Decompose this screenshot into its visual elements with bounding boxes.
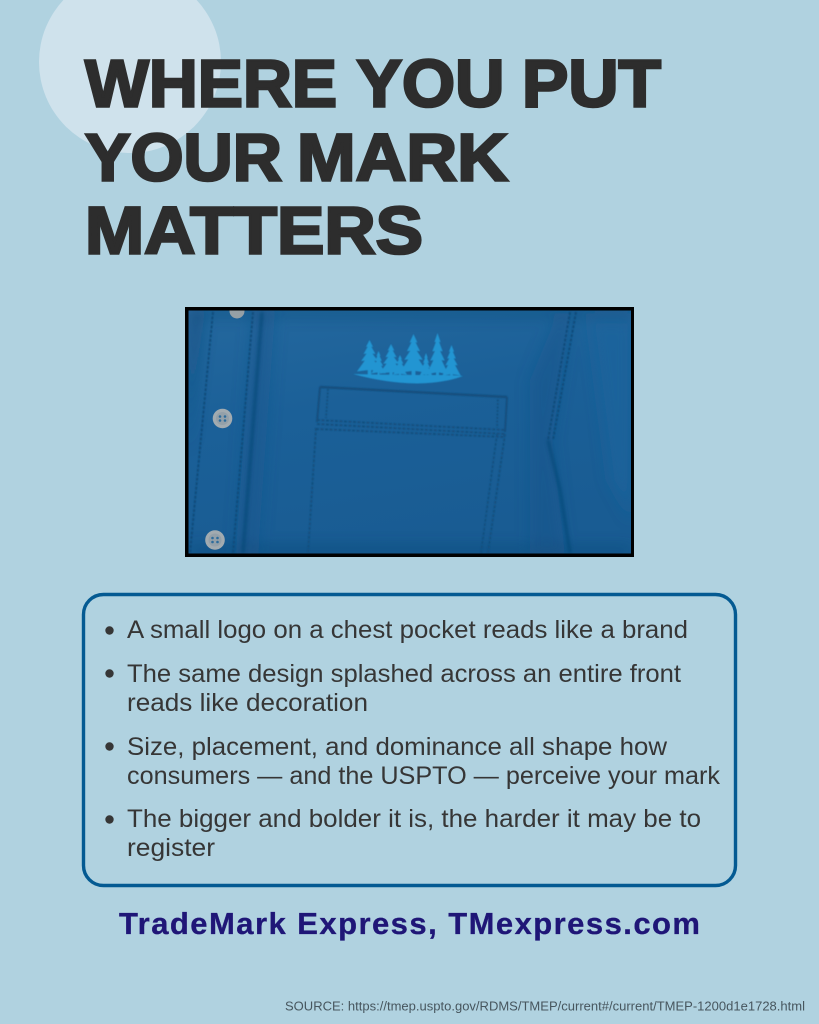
buttons (205, 304, 244, 550)
source note: SOURCE: https://tmep.uspto.gov/RDMS/TMEP/current#/current/TMEP-1200d1e1728.html (285, 1000, 805, 1014)
bullet list: Size, placement, and dominance all shape how (127, 733, 668, 761)
bullet list: register (127, 834, 215, 862)
bullet list: The bigger and bolder it is, the harder it may be to (127, 805, 701, 833)
title: MARK (297, 120, 508, 196)
title: WHERE (85, 46, 337, 122)
title: PUT (522, 46, 661, 122)
decorative circle behind title (39, 0, 221, 153)
placket and seams (190, 312, 576, 553)
title: YOU (356, 46, 504, 122)
title: MATTERS (85, 194, 423, 268)
bullet list: The same design splashed across an entire front (127, 660, 681, 688)
bullet list: reads like decoration (127, 689, 368, 717)
logo: pine trees on a swoosh (353, 333, 463, 384)
panel: key points (84, 594, 736, 886)
photo: blue shirt chest pocket with small logo (185, 304, 634, 557)
bullet list: consumers — and the USPTO — perceive your mark (127, 762, 720, 790)
attribution line: TradeMark Express, TMexpress.com (119, 906, 700, 941)
bullet list (105, 616, 720, 862)
fabric shading (188, 310, 632, 554)
title: YOUR (85, 120, 282, 196)
pocket (308, 387, 507, 553)
title (85, 46, 661, 268)
bullet list: A small logo on a chest pocket reads like a brand (127, 616, 688, 644)
